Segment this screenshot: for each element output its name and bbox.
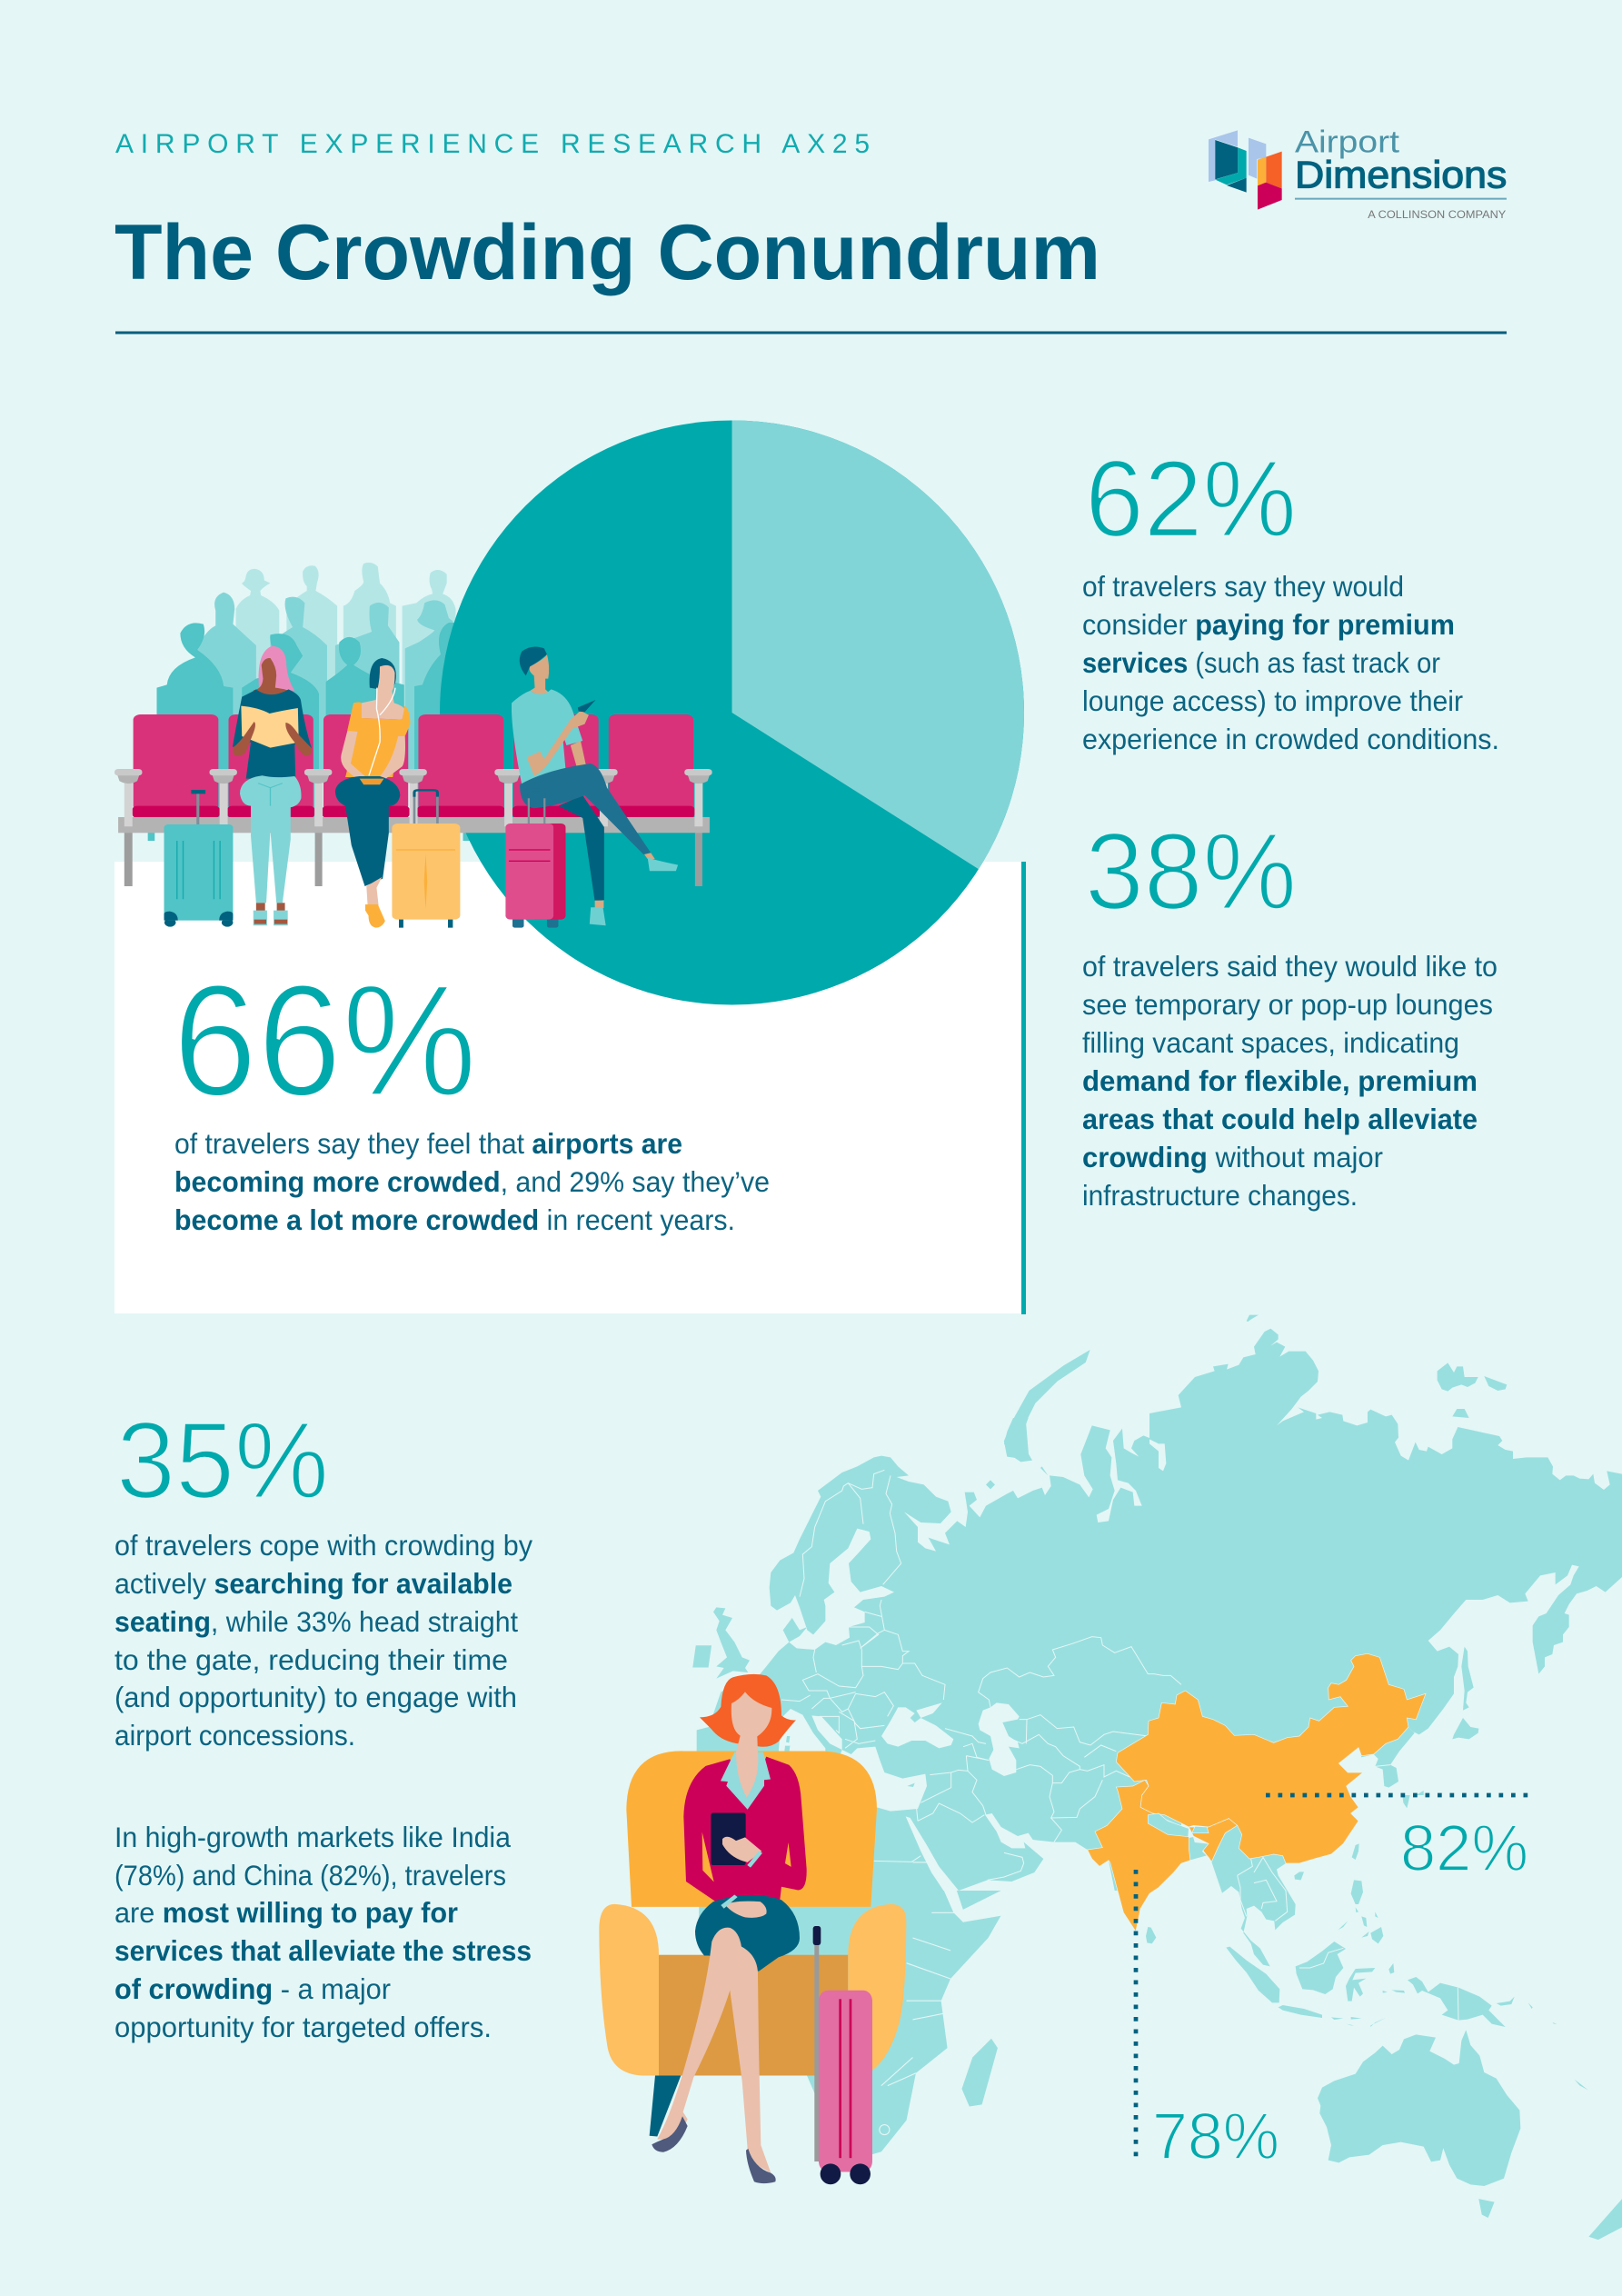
- header: eyebrow label: AIRPORT EXPERIENCE RESEARCH AX25: [115, 129, 870, 159]
- middle row of crowd: [195, 593, 453, 770]
- 38% description: crowding without major: [1082, 1141, 1383, 1173]
- 62% description: of travelers say they would: [1082, 570, 1404, 603]
- traveler: woman reading: [233, 646, 312, 925]
- stat: 38% block: [1082, 811, 1498, 1212]
- map: Southeast Asia, Korea, Indonesia and Australia: [1088, 1653, 1588, 2186]
- traveler: woman with earphones: [335, 658, 410, 928]
- text block: high-growth markets: In high-growth markets like India: [114, 1821, 511, 1853]
- title: The Crowding Conundrum: [114, 209, 1100, 296]
- text block: high-growth markets: [114, 1821, 532, 2043]
- suitcase: pink: [505, 790, 565, 928]
- 38% description: see temporary or pop-up lounges: [1082, 988, 1493, 1021]
- big number 62%: 62%: [1085, 438, 1297, 560]
- map: Siberia and Russian Far East land: [1149, 1315, 1622, 1763]
- pink suitcase: [813, 1926, 872, 2184]
- seat cushions: [133, 806, 694, 818]
- stat: 62% block: [1082, 438, 1499, 755]
- 35% description: (and opportunity) to engage with: [114, 1681, 517, 1713]
- 35% description: of travelers cope with crowding by: [114, 1529, 532, 1562]
- map: India highlighted: [1088, 1780, 1238, 1932]
- text block: high-growth markets: (78%) and China (82%), travelers: [114, 1859, 506, 1892]
- 38% description: infrastructure changes.: [1082, 1179, 1358, 1212]
- map: China highlighted: [1116, 1653, 1426, 1863]
- seat backs: [134, 714, 693, 812]
- logo wordmark: [1295, 125, 1507, 221]
- world map: [692, 1315, 1622, 2240]
- pie: light 34% slice: [732, 420, 1024, 869]
- logo: Airport Dimensions: [1209, 125, 1507, 221]
- map: dotted leader line to China: [1266, 1793, 1528, 1797]
- stat: 35% block: [114, 1400, 532, 1752]
- vertical teal divider: [1021, 862, 1026, 1314]
- logo wordmark: Dimensions: [1295, 155, 1507, 196]
- woman figure: [652, 1674, 807, 2183]
- map: Europe, Middle East and western Asia land: [697, 1418, 1181, 1891]
- 62% description: [1082, 570, 1499, 755]
- logo wordmark: A COLLINSON COMPANY: [1368, 208, 1506, 221]
- 35% description: seating, while 33% head straight: [114, 1605, 518, 1638]
- suitcase: teal: [164, 790, 233, 927]
- traveler: man with phone: [512, 646, 678, 925]
- 35% description: actively searching for available: [114, 1567, 512, 1600]
- 38% description: filling vacant spaces, indicating: [1082, 1026, 1459, 1059]
- armrests: [114, 769, 712, 826]
- illustration: woman in armchair: [599, 1674, 906, 2184]
- pie chart: 66% more crowded: [440, 420, 1024, 1005]
- armchair: [599, 1751, 906, 2136]
- 38% description: of travelers said they would like to: [1082, 950, 1498, 983]
- 38% description: [1082, 950, 1498, 1212]
- 62% description: experience in crowded conditions.: [1082, 723, 1499, 755]
- 62% description: lounge access) to improve their: [1082, 684, 1463, 717]
- logo mark: [1209, 130, 1282, 210]
- map: Nepal, Bhutan and Bangladesh: [1148, 1813, 1211, 1862]
- text block: high-growth markets: of crowding - a major: [114, 1972, 391, 2005]
- logo wordmark: Airport: [1295, 125, 1399, 159]
- big number 38%: 38%: [1085, 811, 1297, 933]
- bench frame and legs: [118, 817, 710, 886]
- 66% description: becoming more crowded, and 29% say they’ve: [174, 1165, 770, 1198]
- pie: dark 66% slice: [440, 420, 1024, 1005]
- map: dotted leader line to India: [1134, 1870, 1138, 2157]
- illustration: airport seats with travelers: [114, 646, 712, 928]
- 62% description: consider paying for premium: [1082, 608, 1455, 641]
- 66% description: of travelers say they feel that airports are: [174, 1127, 682, 1160]
- 38% description: demand for flexible, premium: [1082, 1064, 1478, 1097]
- crowd silhouettes behind seats: [148, 563, 471, 841]
- text block: high-growth markets: services that alleviate the stress: [114, 1934, 532, 1967]
- 66% description: become a lot more crowded in recent years.: [174, 1203, 735, 1236]
- map: seas, islands and borders of Europe and western Asia: [713, 1418, 1181, 1891]
- back row of crowd: [236, 563, 455, 715]
- text block: high-growth markets: opportunity for targeted offers.: [114, 2011, 492, 2043]
- 38% description: areas that could help alleviate: [1082, 1103, 1478, 1135]
- map: Africa, Madagascar, Novaya Zemlya, Ireland and Tasmania: [692, 1350, 1622, 2240]
- big number 35%: 35%: [116, 1400, 329, 1522]
- suitcase: yellow: [392, 790, 460, 928]
- 62% description: services (such as fast track or: [1082, 646, 1440, 679]
- callout: India 78%: 78%: [1152, 2101, 1279, 2173]
- 35% description: airport concessions.: [114, 1719, 355, 1752]
- text block: high-growth markets: are most willing to pay for: [114, 1896, 458, 1929]
- big number 66%: 66%: [173, 953, 477, 1130]
- stat: 66% block: [173, 953, 770, 1236]
- 66% description: [174, 1127, 770, 1236]
- front row of crowd: [148, 623, 471, 841]
- 35% description: to the gate, reducing their time: [114, 1643, 508, 1676]
- panel: white 66% panel: [114, 862, 1023, 1313]
- 35% description: [114, 1529, 532, 1752]
- callout: China 82%: 82%: [1400, 1812, 1528, 1885]
